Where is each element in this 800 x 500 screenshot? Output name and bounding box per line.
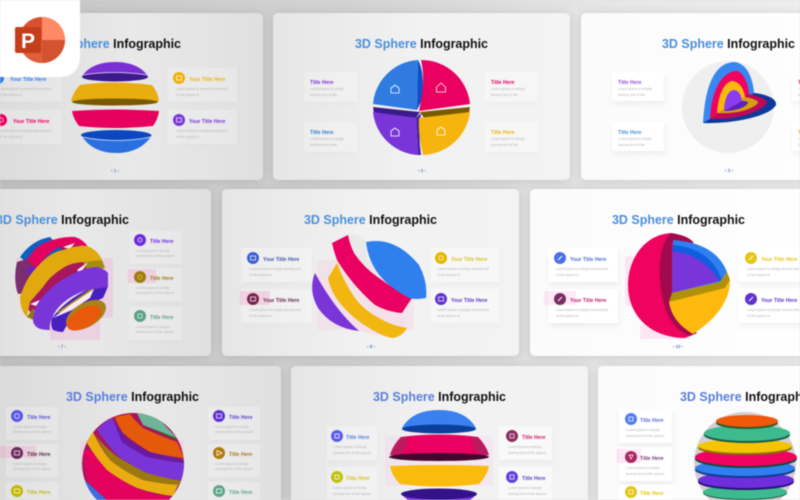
slice: pink [332,235,412,313]
page number: ‹ 10 › [673,344,684,349]
card: title here maroon [499,426,552,460]
card: title here pink [792,72,800,101]
slice: yellow band [390,465,489,486]
ribbon: olive slit [56,286,98,313]
card: title here blue: dummy text of the [618,143,645,147]
card: your title here blue: Lorem ipsum is simply dummy text [0,87,51,91]
quarter: olive rim [669,272,730,303]
card: title here blue [304,122,357,152]
quadrant: yellow [419,112,470,155]
card: your title here yellow: of the epsum is [747,273,770,277]
slice: pink band [72,110,159,128]
heading: slide 1 title: 3D Sphere Infographic [48,36,181,51]
heading: bottom centre title: 3D Sphere Infographic [373,389,506,404]
card: title here blue: Title Here [346,435,370,441]
panel: slide 3 [581,13,800,180]
slice: light rim [348,234,412,298]
ribbon: yellow [20,246,102,317]
ribbon: blue [85,480,107,500]
heart layer: purple [724,90,748,111]
card: title here purple: Lorem ipsum is simply [215,425,249,429]
card: title here pink: dummy text of the [491,93,518,97]
card: your title here maroon: Your Title Here [570,298,607,304]
quarter: purple [672,251,719,293]
card: your title here purple: Lorem ipsum is simply dummy text [176,129,228,133]
card: title here blue: Title Here [27,415,51,421]
heading: slide 8 title: 3D Sphere Infographic [304,212,437,227]
card: title here maroon: dummy text of the epsum [508,451,546,455]
card: title here orange [208,444,260,477]
card: title here purple [612,72,664,101]
card: title here purple: Title Here [618,80,642,86]
card: title here yellow [485,122,538,152]
card: your title here yellow: Your Title Here [451,257,488,263]
card: title here yellow [619,485,672,500]
ribbon: orange end [61,294,111,336]
page number: ‹ 3 › [725,168,733,173]
ribbon: dark purple [113,420,184,463]
card: title here purple: dummy text of the [310,93,337,97]
heading: slide 2 title: 3D Sphere Infographic [355,36,488,51]
card: title here blue [612,122,664,151]
heart layer: pink [710,71,767,119]
ribbon: olive top [83,260,105,272]
card: title here blue [619,409,672,443]
card: title here purple: Title Here [310,80,334,86]
ribbon: maroon inner [32,262,83,302]
card: your title here blue: of the epsum is [249,273,272,277]
card: title here pink: Title Here [491,80,515,86]
slice: blue dome [81,130,152,153]
card: title here olive: dummy text of the epsum [136,291,174,295]
sphere: bottom left ribbons [80,413,186,500]
card: title here blue: Title Here [310,130,334,136]
card: title here orange: Lorem ipsum is simply [215,462,249,466]
sphere: bottom centre stacked slices [385,410,493,500]
card: title here blue: dummy text of the epsum [13,430,51,434]
sphere: slide 2 quadrants [373,60,470,155]
ribbon: teal cap [137,413,177,440]
card: title here yellow: dummy text of the epsum [333,492,371,496]
slice: pink band [389,434,489,461]
ribbon: top gap [63,243,75,249]
card: title here maroon [0,444,58,477]
card: title here blue: Lorem ipsum is simply [333,445,367,449]
card: your title here yellow: Lorem ipsum is simply dummy text [437,267,489,271]
card: your title here yellow [431,248,499,282]
card: your title here purple [168,110,237,144]
disc: pink [695,448,797,468]
disc: yellow [698,439,792,455]
slice: yellow [328,263,407,338]
card: title here olive: Lorem ipsum is simply [136,286,170,290]
panel: slide 7 [0,189,211,356]
card: title here blue: dummy text of the epsum [333,451,371,455]
card: title here purple: dummy text of the epsum [136,254,174,258]
slice: purple dome [82,62,148,82]
shell: dark rim [660,233,697,336]
card: title here purple [129,231,182,264]
card: title here teal [129,307,182,340]
card: your title here maroon: of the epsum is [249,314,272,318]
card: title here teal: Title Here [229,490,253,496]
card: your title here maroon [544,289,618,323]
card: title here yellow: Lorem ipsum is simply [333,486,367,490]
card: your title here pink: Lorem ipsum is simply dummy text [0,129,51,133]
card: title here maroon: dummy text of the epsum [13,467,51,471]
card: title here blue: Title Here [618,130,642,136]
ribbon: blue cap [20,237,62,273]
sphere: slide 10 cut-away [625,233,730,339]
quadrant: purple [373,112,421,155]
card: your title here blue: Your Title Here [10,77,47,83]
ribbon: orange [115,414,184,458]
card: title here blue: Lorem ipsum is simply [310,137,344,141]
card: your title here purple [738,289,800,323]
card: title here teal: Lorem ipsum is simply [136,325,170,329]
sphere: slide 8 diagonal slices [312,234,426,338]
card: your title here purple: Your Title Here [189,119,226,125]
panel: slide 2 [273,13,570,180]
disc: teal lower [703,485,787,500]
ribbon: pink top [27,237,88,268]
disc: blue [695,460,795,478]
card: title here blue: dummy text of the [310,143,337,147]
card: title here pink: Lorem ipsum is simply [491,87,525,91]
ribbon: dark purple right [51,286,108,332]
badge: PowerPoint logo [0,0,80,77]
card: title here purple [304,72,357,102]
disc: purple [698,472,794,490]
panel: slide 10 [530,189,800,356]
ribbon: maroon base [82,413,184,500]
ribbon: maroon base [20,242,95,312]
card: your title here yellow: Your Title Here [761,257,798,263]
card: title here blue: dummy text of the epsum [626,434,664,438]
card: title here purple: dummy text of the epsum [215,430,253,434]
card: title here teal [208,482,260,500]
card: your title here blue [0,68,62,102]
card: title here purple: Title Here [229,415,253,421]
heart layer: blue [703,62,776,123]
card: title here pink: Title Here [640,456,664,462]
sphere: bottom right disc stack [694,412,797,500]
panel: slide bottom left [0,366,281,500]
card: your title here yellow: of the epsum is [437,273,460,277]
card: title here maroon: Lorem ipsum is simply [508,445,542,449]
card: title here yellow: Lorem ipsum is simply [491,137,525,141]
card: your title here blue: Lorem ipsum is simply dummy text [556,267,608,271]
card: title here yellow [6,482,58,500]
sphere: slide 3 heart layers [682,61,776,153]
card: title here teal: Title Here [150,315,174,321]
card: your title here yellow [168,68,237,102]
slice: yellow band [71,82,159,106]
card: your title here maroon: Lorem ipsum is simply dummy text [556,308,608,312]
underside: purple and gold [373,107,470,118]
card: your title here purple: of the epsum is [437,314,460,318]
heading: slide 3 title: 3D Sphere Infographic [662,36,795,51]
card: your title here blue [241,248,312,282]
ribbon: purple [33,267,108,330]
ribbon: olive lower left [27,308,38,322]
heart layer: yellow [717,81,758,113]
card: your title here purple: of the epsum is [176,135,199,139]
card: your title here purple: Your Title Here [761,298,798,304]
card: title here yellow [327,467,377,500]
card: your title here maroon: of the epsum is [556,314,579,318]
card: your title here blue: Lorem ipsum is simply dummy text [249,267,301,271]
card: your title here purple [431,289,499,323]
card: your title here blue [548,248,618,282]
card: title here blue [6,407,58,440]
quadrant: blue [373,60,423,110]
page number: ‹ 2 › [418,168,426,173]
card: title here purple [208,407,260,440]
heading: slide 10 title: 3D Sphere Infographic [612,212,745,227]
sphere: slide 7 twisted ribbons [15,237,113,340]
card: title here teal: dummy text of the epsum [136,330,174,334]
heading: slide 7 title: 3D Sphere Infographic [0,212,129,227]
panel: slide bottom right [598,366,800,500]
heading: bottom left title: 3D Sphere Infographic [66,389,199,404]
card: your title here purple: Lorem ipsum is simply dummy text [437,308,489,312]
card: title here yellow: Title Here [491,130,515,136]
card: title here blue: Lorem ipsum is simply [13,425,47,429]
slice: purple [312,273,359,331]
card: title here blue [327,426,377,460]
quadrant: pink [419,60,470,111]
backdrop circle [682,61,774,153]
card: your title here blue: of the epsum is [556,273,579,277]
card: title here blue: Lorem ipsum is simply [626,428,660,432]
card: title here olive: Title Here [150,276,174,282]
card: your title here blue: Your Title Here [570,257,607,263]
ribbon: dark magenta back [15,258,42,294]
panel: slide 8 [222,189,519,356]
ribbon: pink [83,450,170,500]
card: title here purple: Title Here [150,239,174,245]
card: your title here pink: Your Title Here [13,119,50,125]
card: title here purple [499,467,552,500]
card: title here yellow: Title Here [346,476,370,482]
card: title here yellow: Title Here [27,490,51,496]
card: title here pink [485,72,538,102]
page number: ‹ 1 › [111,168,119,173]
quarter: yellow [669,280,730,334]
card: your title here maroon: Lorem ipsum is simply dummy text [249,308,301,312]
card: title here blue: Lorem ipsum is simply [618,137,652,141]
card: title here orange: dummy text of the epsum [215,467,253,471]
card: your title here pink [0,110,62,144]
card: title here yellow [792,122,800,151]
icon: PowerPoint: P [21,30,35,53]
page number: ‹ 8 › [367,344,375,349]
ribbon: purple back [26,252,62,283]
card: title here yellow: dummy text of the [491,143,518,147]
disc: teal upper [704,425,790,443]
card: your title here blue: Your Title Here [263,257,300,263]
ribbon: yellow [87,432,179,496]
card: title here olive [128,268,182,301]
card: title here pink: dummy text of the epsum [626,472,664,476]
card: title here purple: Lorem ipsum is simply [618,87,652,91]
card: title here maroon: Lorem ipsum is simply [13,462,47,466]
disc: orange [716,415,778,429]
page number: ‹ 7 › [58,344,66,349]
sphere: slide 1 stacked slices [71,62,159,153]
card: your title here yellow: Your Title Here [189,77,226,83]
shell: pink [628,233,697,338]
card: title here pink [617,447,672,481]
ribbon: gaps [30,262,88,306]
ribbon: olive [95,435,182,485]
backdrop sphere [694,412,796,500]
card: title here maroon: Title Here [522,435,546,441]
quarter: dark blue rim [672,245,722,282]
card: title here blue: Title Here [640,418,664,424]
card: your title here yellow: Lorem ipsum is simply dummy text [747,267,799,271]
card: your title here purple: of the epsum is [747,314,770,318]
card: your title here purple: Lorem ipsum is simply dummy text [747,308,799,312]
card: title here yellow: Title Here [640,491,664,497]
card: your title here yellow: of the epsum is [176,93,199,97]
card: title here orange: Title Here [229,452,253,458]
card: title here maroon: Title Here [27,452,51,458]
panel: slide bottom centre [291,366,588,500]
card: title here pink: Lorem ipsum is simply [626,466,660,470]
card: title here purple: dummy text of the [618,93,645,97]
card: your title here purple: Your Title Here [451,298,488,304]
slice: blue dome [402,410,476,434]
ribbon: white slit [53,289,94,318]
card: your title here maroon [240,289,312,323]
card: title here purple: Title Here [522,476,546,482]
card: title here purple: Lorem ipsum is simply [310,87,344,91]
ribbon: purple [97,418,186,481]
card: title here purple: Lorem ipsum is simply [136,249,170,253]
quarter: blue [672,240,727,293]
slice: blue dome [366,241,426,299]
card: your title here maroon: Your Title Here [263,298,300,304]
card: title here purple: dummy text of the epsum [508,492,546,496]
panel: slide 1 [0,13,263,180]
card: your title here yellow: Lorem ipsum is simply dummy text [176,87,228,91]
card: title here purple: Lorem ipsum is simply [508,486,542,490]
slice: purple dome [401,488,477,500]
card: your title here yellow [738,248,800,282]
slice: pale band [315,258,407,338]
